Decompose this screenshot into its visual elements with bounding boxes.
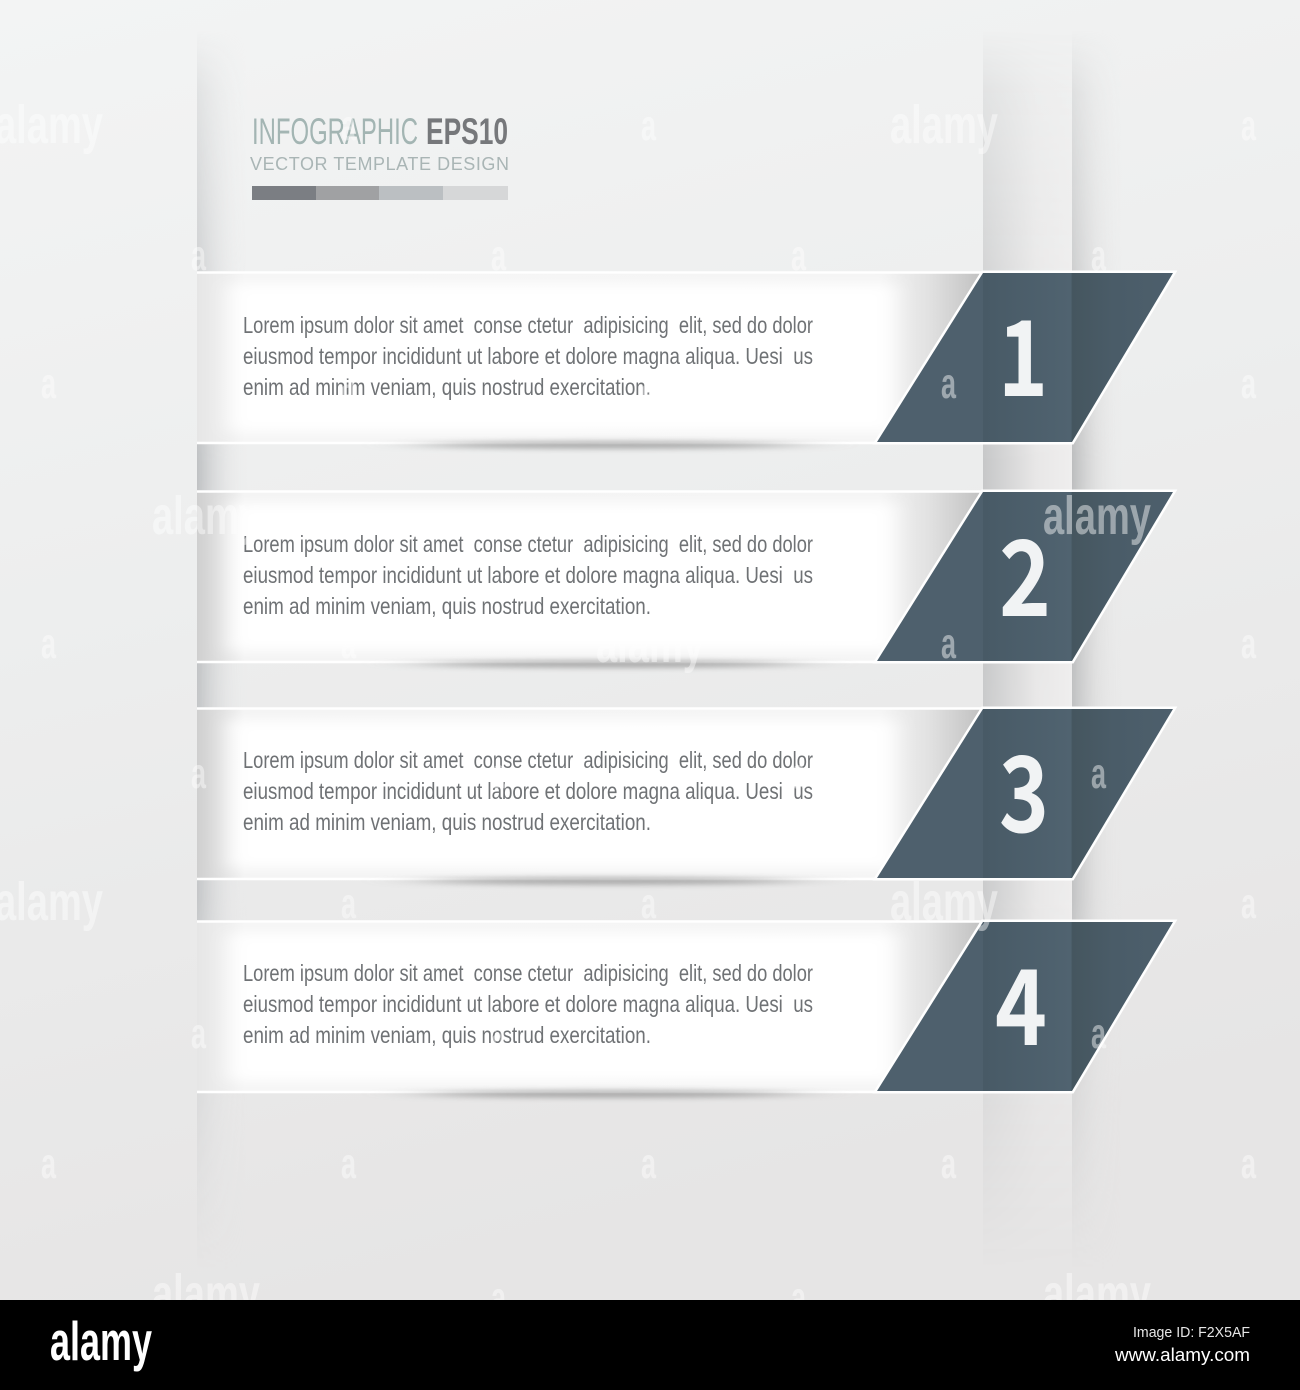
watermarks: a	[1241, 360, 1257, 408]
watermarks: a	[1241, 1140, 1257, 1188]
watermarks: a	[641, 1140, 657, 1188]
column folds	[197, 58, 1102, 1167]
number tab 4: 4	[995, 924, 1047, 1076]
heading: EPS10	[426, 111, 508, 152]
watermarks: a	[491, 1010, 507, 1058]
watermarks: a	[641, 880, 657, 928]
watermarks: a	[191, 750, 207, 798]
text 3	[243, 747, 813, 835]
panel 2	[197, 491, 983, 668]
panel 3	[197, 708, 983, 884]
number tab 1	[877, 273, 1173, 442]
watermarks: a	[1091, 232, 1107, 280]
watermarks: a	[41, 360, 57, 408]
watermarks: alamy	[596, 614, 704, 674]
text 2: eiusmod tempor incididunt ut labore et dolore magna aliqua. Uesi us	[243, 562, 813, 588]
footer logo: alamy	[50, 1310, 152, 1372]
panel 1	[197, 272, 983, 448]
watermarks: a	[341, 102, 357, 150]
watermarks: a	[491, 750, 507, 798]
number tab 4	[877, 922, 1173, 1091]
number tab 1: 1	[998, 275, 1048, 427]
text 1: Lorem ipsum dolor sit amet conse ctetur adipisicing elit, sed do dolor	[243, 312, 813, 338]
heading	[250, 111, 509, 174]
text 2: Lorem ipsum dolor sit amet conse ctetur adipisicing elit, sed do dolor	[243, 531, 813, 557]
watermarks: alamy	[1043, 486, 1151, 546]
heading: VECTOR TEMPLATE DESIGN	[250, 154, 509, 174]
watermarks: a	[41, 620, 57, 668]
text 1	[243, 312, 813, 400]
watermarks: alamy	[152, 1264, 260, 1324]
text 4: Lorem ipsum dolor sit amet conse ctetur adipisicing elit, sed do dolor	[243, 960, 813, 986]
shadow 4	[420, 1090, 800, 1098]
shadow 2	[420, 660, 800, 668]
heading: INFOGRAPHIC	[252, 111, 418, 152]
watermarks: alamy	[890, 95, 998, 155]
text 3: enim ad minim veniam, quis nostrud exercitation.	[243, 809, 651, 835]
watermarks: a	[1241, 880, 1257, 928]
watermarks: alamy	[1043, 1264, 1151, 1324]
watermarks: a	[941, 360, 957, 408]
watermarks: a	[191, 1010, 207, 1058]
website: www.alamy.com	[1114, 1345, 1250, 1365]
watermarks: a	[641, 102, 657, 150]
watermarks: a	[341, 620, 357, 668]
text 4	[243, 960, 813, 1048]
text 3: Lorem ipsum dolor sit amet conse ctetur adipisicing elit, sed do dolor	[243, 747, 813, 773]
watermarks: alamy	[152, 486, 260, 546]
watermarks: alamy	[890, 872, 998, 932]
text 1: eiusmod tempor incididunt ut labore et dolore magna aliqua. Uesi us	[243, 343, 813, 369]
heading colour bar	[252, 186, 508, 200]
number tab 3	[877, 709, 1173, 878]
watermarks: a	[41, 1140, 57, 1188]
watermarks: a	[341, 360, 357, 408]
text 4: eiusmod tempor incididunt ut labore et dolore magna aliqua. Uesi us	[243, 991, 813, 1017]
image id: Image ID: F2X5AF	[1133, 1324, 1250, 1341]
watermarks: a	[1091, 750, 1107, 798]
text 2: enim ad minim veniam, quis nostrud exercitation.	[243, 593, 651, 619]
text 1: enim ad minim veniam, quis nostrud exercitation.	[243, 374, 651, 400]
number tab 2: 2	[999, 495, 1051, 647]
watermarks: a	[341, 1140, 357, 1188]
watermarks: a	[191, 232, 207, 280]
watermarks: a	[1091, 1010, 1107, 1058]
watermarks: a	[491, 1274, 507, 1322]
watermarks: a	[941, 620, 957, 668]
watermarks: a	[1241, 102, 1257, 150]
panel 4	[197, 921, 983, 1098]
text 2	[243, 531, 813, 619]
shadow 3	[420, 878, 800, 884]
number tab 2	[877, 492, 1173, 661]
watermarks: a	[791, 1010, 807, 1058]
number tab 3: 3	[999, 711, 1049, 863]
watermarks: a	[1241, 620, 1257, 668]
footer bar	[0, 1300, 1300, 1390]
watermarks: a	[641, 360, 657, 408]
watermarks: a	[791, 750, 807, 798]
shadow 1	[420, 442, 800, 448]
text 4: enim ad minim veniam, quis nostrud exercitation.	[243, 1022, 651, 1048]
text 3: eiusmod tempor incididunt ut labore et dolore magna aliqua. Uesi us	[243, 778, 813, 804]
watermarks: a	[791, 232, 807, 280]
watermarks: a	[791, 1274, 807, 1322]
watermarks: a	[941, 1140, 957, 1188]
watermarks: a	[491, 232, 507, 280]
watermarks: a	[341, 880, 357, 928]
